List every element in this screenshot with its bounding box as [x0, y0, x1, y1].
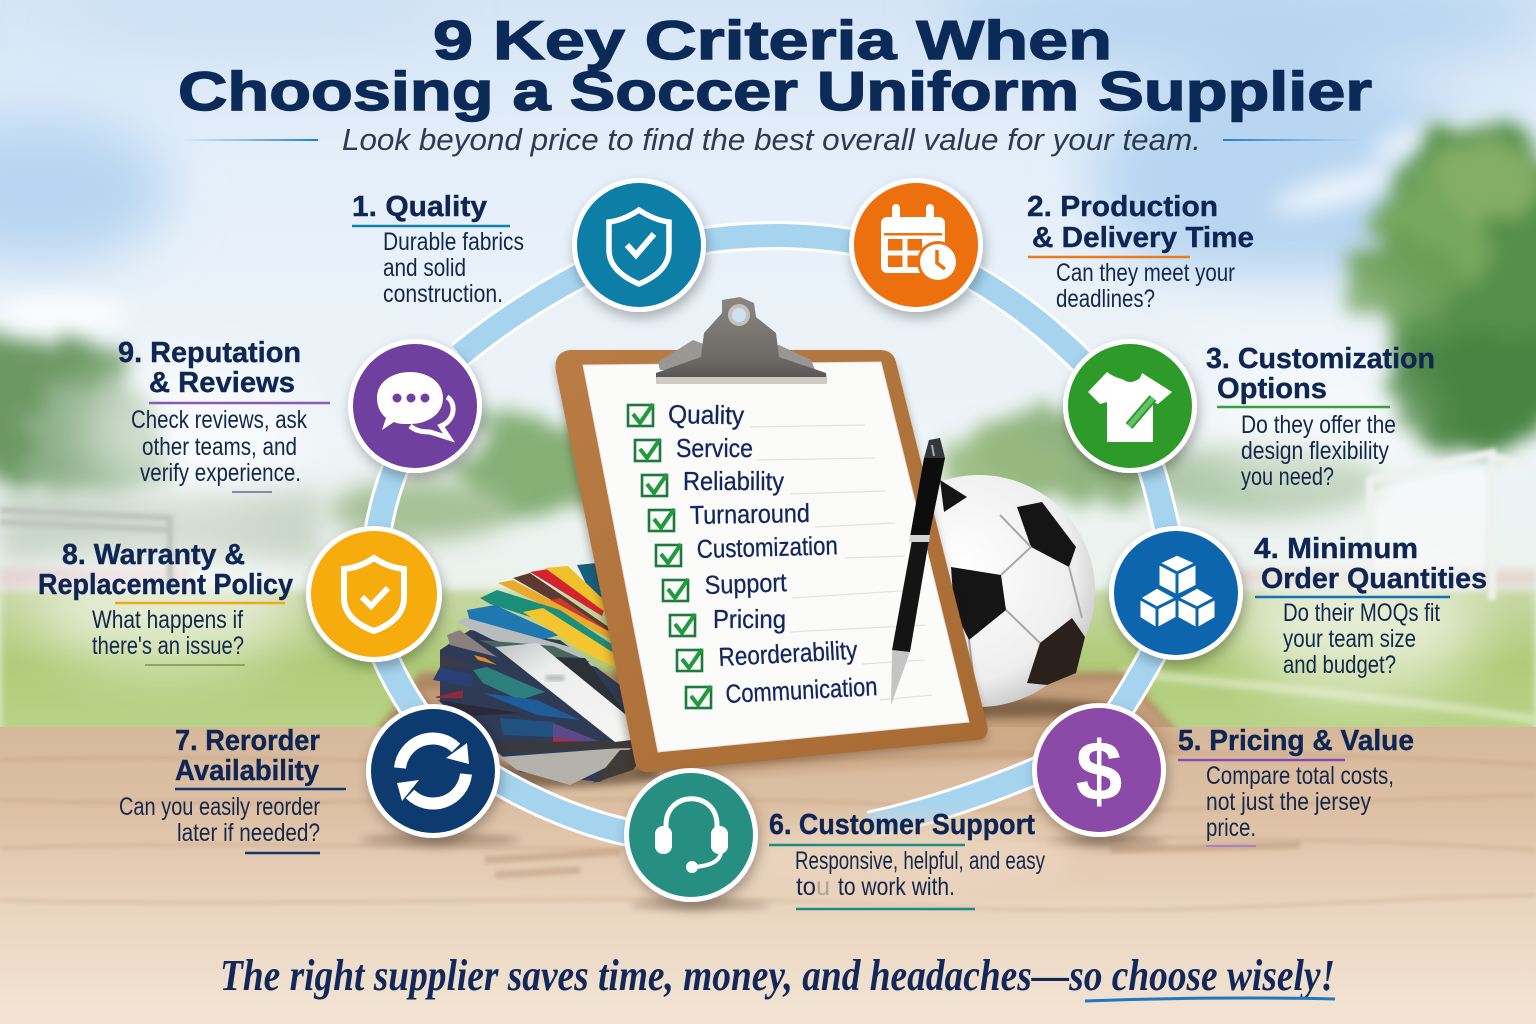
criterion 4: minimum order quantities: 4. Minimum	[1254, 533, 1418, 565]
circle 2: calendar and clock icon	[849, 178, 983, 312]
circle 8: warranty shield icon	[306, 526, 442, 662]
criterion 4: minimum order quantities: your team size	[1283, 625, 1416, 653]
checklist: Quality	[668, 399, 744, 430]
checklist: Communication	[725, 671, 878, 709]
checklist: Reorderability	[718, 635, 858, 672]
clipboard	[556, 297, 988, 777]
checklist: Customization	[696, 530, 838, 564]
title	[178, 9, 1372, 122]
criterion 8: warranty and replacement policy: What happens if	[92, 606, 243, 634]
circle 3: t-shirt and pencil icon	[1063, 339, 1197, 473]
circle 4: stacked cubes icon	[1109, 526, 1243, 660]
criterion 6: customer support: 6. Customer Support	[769, 809, 1035, 841]
criterion 3: customization options: Do they offer the	[1241, 411, 1396, 439]
criterion 5: pricing and value: price.	[1206, 814, 1256, 842]
criterion 9: reputation and reviews: & Reviews	[149, 367, 295, 399]
criterion 1: quality: and solid	[383, 254, 466, 282]
criterion 8: warranty and replacement policy: 8. Warranty &	[62, 539, 245, 571]
criterion 1: quality	[352, 191, 524, 308]
checklist: Pricing	[713, 604, 786, 634]
circle 5: dollar icon	[1032, 703, 1166, 837]
metal clip	[656, 297, 827, 384]
circle 7: reorder arrows icon	[366, 704, 500, 838]
checklist: Support	[704, 567, 788, 600]
criterion 3: customization options: 3. Customization	[1206, 343, 1435, 375]
criterion 8: warranty and replacement policy: there's an issue?	[92, 632, 244, 660]
title: 9 Key Criteria When	[433, 9, 1112, 71]
clipboard board	[556, 350, 988, 772]
circle 9: speech bubbles icon	[348, 339, 482, 473]
criterion 9: reputation and reviews: Check reviews, ask	[131, 406, 307, 434]
criterion 4: minimum order quantities	[1254, 533, 1487, 679]
criterion 5: pricing and value	[1178, 725, 1414, 846]
circle 6: headset icon	[624, 768, 758, 902]
criterion 6: customer support: to work with.	[838, 873, 955, 901]
criterion 3: customization options: design flexibility	[1241, 437, 1389, 465]
criterion 4: minimum order quantities: Do their MOQs fit	[1283, 599, 1440, 627]
criterion 7: reorder availability: Can you easily reorder	[119, 793, 320, 821]
criterion 2: production and delivery time: & Delivery Time	[1032, 222, 1254, 254]
criterion 4: minimum order quantities: Order Quantities	[1261, 563, 1487, 595]
circle 5: dollar icon: $	[1076, 724, 1122, 818]
criterion 9: reputation and reviews: 9. Reputation	[118, 337, 301, 369]
ring connecting the criteria	[376, 236, 1170, 835]
criterion 7: reorder availability: later if needed?	[177, 819, 320, 847]
soccer ball	[863, 475, 1110, 718]
criterion 8: warranty and replacement policy: Replacement Policy	[38, 569, 293, 601]
criterion 5: pricing and value: not just the jersey	[1206, 788, 1371, 816]
criterion 1: quality: 1. Quality	[352, 191, 487, 223]
checklist	[628, 399, 878, 709]
checklist: Reliability	[683, 466, 784, 496]
criterion 7: reorder availability	[119, 725, 346, 853]
criterion 9: reputation and reviews: verify experience.	[140, 459, 301, 487]
criterion 7: reorder availability: Availability	[175, 755, 319, 787]
criterion 5: pricing and value: 5. Pricing & Value	[1178, 725, 1414, 757]
checklist: Turnaround	[690, 498, 810, 530]
criterion 9: reputation and reviews	[118, 337, 330, 492]
criterion 9: reputation and reviews: other teams, and	[142, 433, 297, 461]
criterion 6: customer support: to	[796, 873, 816, 901]
criterion 2: production and delivery time: Can they meet your	[1056, 259, 1235, 287]
criterion 8: warranty and replacement policy	[38, 539, 293, 665]
circle 1: quality shield icon	[572, 178, 706, 312]
criterion 6: customer support	[769, 809, 1045, 909]
pen	[891, 438, 945, 705]
criterion 1: quality: construction.	[383, 280, 503, 308]
criterion 1: quality: Durable fabrics	[383, 228, 524, 256]
criterion 5: pricing and value: Compare total costs,	[1206, 762, 1394, 790]
closing tagline: The right supplier saves time, money, and headaches—so choose wisely!	[220, 951, 1335, 1000]
criterion 3: customization options: you need?	[1241, 463, 1334, 491]
fabric swatch fan	[433, 563, 660, 787]
criterion 2: production and delivery time	[1027, 191, 1254, 313]
subtitle: Look beyond price to find the best overall value for your team.	[342, 122, 1201, 157]
ruled lines	[750, 425, 932, 700]
criterion 2: production and delivery time: 2. Production	[1027, 191, 1218, 223]
criterion 3: customization options: Options	[1217, 373, 1327, 405]
criterion 7: reorder availability: 7. Rerorder	[175, 725, 320, 757]
checklist: Service	[676, 433, 753, 463]
criterion 3: customization options	[1206, 343, 1435, 491]
criterion 4: minimum order quantities: and budget?	[1283, 651, 1396, 679]
criterion 6: customer support: u	[816, 873, 830, 901]
criterion 6: customer support: Responsive, helpful, and easy	[795, 847, 1045, 875]
paper sheet	[583, 362, 969, 752]
soft haze behind customer support text	[725, 822, 1075, 902]
criterion 2: production and delivery time: deadlines?	[1056, 285, 1155, 313]
title: Choosing a Soccer Uniform Supplier	[178, 60, 1372, 122]
